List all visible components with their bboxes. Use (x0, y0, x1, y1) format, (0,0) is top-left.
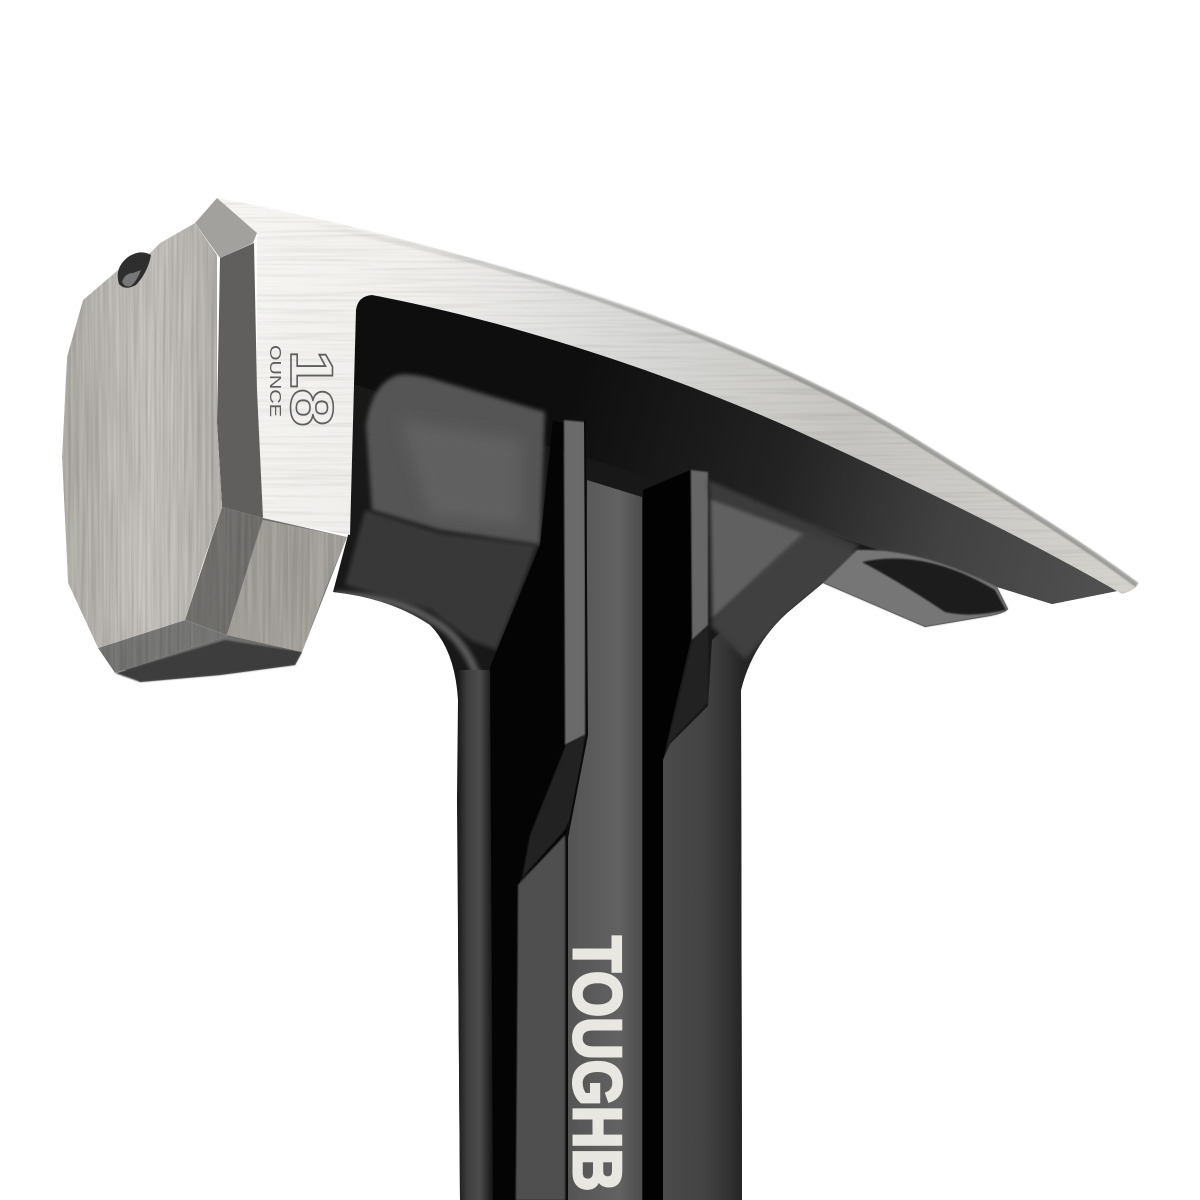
claw dark recess (862, 558, 1006, 615)
top chamfer (195, 198, 257, 258)
left handle column (458, 670, 490, 1200)
pin hole (118, 252, 151, 288)
18 ounce engraving: 18 (278, 350, 346, 427)
lower lit chamfer (227, 520, 347, 652)
moulded shading planes (335, 270, 1140, 1200)
striking face (62, 223, 222, 648)
striking end of hammer (62, 198, 347, 682)
centre panel (567, 480, 642, 1200)
base behind chamfers (98, 507, 347, 682)
dark side bevel (217, 243, 263, 518)
lower left lit plane (516, 835, 565, 1200)
right handle column (663, 628, 773, 1200)
right triangular plane (708, 480, 860, 660)
bottom chamfer (98, 620, 227, 673)
product photo: hammer (62, 198, 1139, 1200)
neck rim highlight (334, 589, 482, 670)
second rib black stripe (643, 470, 692, 1200)
upper edge grey band (300, 222, 1137, 585)
bottom dark underside (115, 640, 302, 682)
first rib lit strip (564, 420, 585, 745)
second rib lit strip (691, 470, 708, 640)
polished head cheek (217, 198, 1137, 594)
lower left dark plane (345, 510, 537, 650)
brand lettering on handle: TOUGHB (559, 936, 636, 1191)
ounce label: OUNCE (266, 345, 283, 417)
black handle and head body (333, 270, 1140, 1200)
lower dark chamfer (185, 507, 263, 635)
upper left grey plane (366, 374, 545, 545)
first rib black stripe (490, 420, 585, 1200)
nail claw (823, 550, 1008, 627)
